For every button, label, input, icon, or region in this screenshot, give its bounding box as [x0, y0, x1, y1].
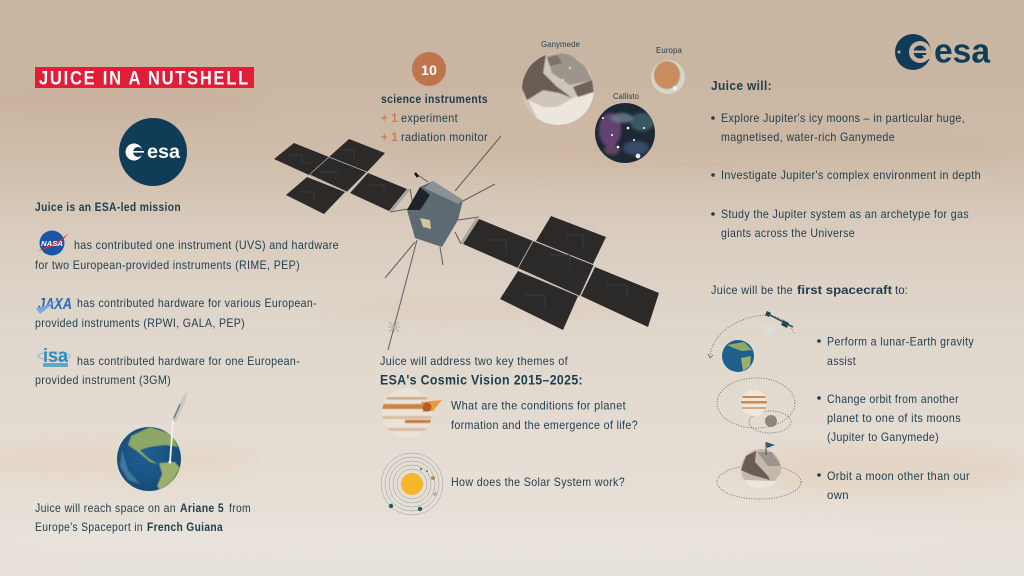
text: NASA contribution: for two European-provided instruments (RIME, PEP): [35, 258, 300, 272]
text: gravity assist: [817, 334, 974, 368]
text: NASA contribution: [35, 238, 339, 272]
text: cosmic vision heading: Juice will address two key themes of: [380, 354, 568, 368]
text: launch: Juice will reach space on an: [35, 501, 176, 515]
logo: JAXA: JAXA: [38, 296, 72, 313]
text: orbit change: (Jupiter to Ganymede): [827, 430, 939, 444]
text: moon orbit: [817, 469, 970, 502]
bullet: study: Study the Jupiter system as an archetype for gas: [721, 207, 969, 221]
bullet: study: giants across the Universe: [721, 226, 855, 240]
icon: lunar-Earth gravity assist: [708, 311, 794, 372]
text: JAXA contribution: [35, 296, 317, 330]
callout: science instruments: radiation monitor: [401, 130, 488, 144]
logo: NASA: NASA: [41, 239, 63, 248]
text: theme 1: [451, 398, 638, 432]
bullet: explore: [711, 111, 965, 144]
spacecraft body: [407, 181, 463, 247]
moon: Callisto: Callisto: [613, 91, 639, 101]
text: orbit change: [817, 392, 961, 444]
icon: moon orbit with flag: [717, 442, 801, 499]
callout: science instruments: [381, 52, 488, 144]
text: launch: from: [229, 501, 251, 515]
text: moon orbit: own: [827, 488, 849, 502]
text: orbit change: Change orbit from another: [827, 392, 959, 406]
bullet: explore: magnetised, water-rich Ganymede: [721, 130, 895, 144]
callout: science instruments: 10: [421, 62, 437, 78]
text: ISA contribution: [35, 354, 300, 387]
heading: first spacecraft: first spacecraft: [797, 283, 892, 297]
callout: science instruments: + 1: [381, 111, 398, 125]
bullet: explore: Explore Jupiter's icy moons – in particular huge,: [721, 111, 965, 125]
rocket trail: [170, 421, 173, 462]
heading: first spacecraft: to:: [895, 285, 908, 297]
text: theme 1: formation and the emergence of life?: [451, 418, 638, 432]
heading: Juice will: Juice will:: [711, 78, 772, 93]
text: gravity assist: Perform a lunar-Earth gravity: [827, 334, 974, 348]
callout: science instruments: science instruments: [381, 92, 488, 106]
text: theme 1: What are the conditions for planet: [451, 398, 626, 412]
text: cosmic vision heading: [380, 354, 583, 388]
text: launch: Ariane 5: [180, 501, 224, 515]
callout: science instruments: + 1: [381, 130, 398, 144]
logo: esa round badge: [119, 118, 187, 186]
illustration: Earth with Ariane 5: [117, 391, 187, 491]
text: launch: French Guiana: [147, 520, 223, 534]
text: JAXA contribution: provided instruments (RPWI, GALA, PEP): [35, 316, 245, 330]
icon: Solar System: [381, 453, 443, 515]
moon: Ganymede: Ganymede: [541, 39, 580, 49]
text: gravity assist: assist: [827, 354, 856, 368]
text: ISA contribution: provided instrument (3GM): [35, 373, 171, 387]
text: NASA contribution: has contributed one instrument (UVS) and hardware: [74, 238, 339, 252]
spacecraft: Juice: [274, 136, 659, 350]
callout: science instruments: experiment: [401, 111, 458, 125]
booms and antennas: [385, 136, 501, 350]
solar array: right: [460, 216, 659, 330]
rocket: [168, 391, 187, 464]
text: ISA contribution: has contributed hardware for one European-: [77, 354, 300, 368]
bullet: investigate: Investigate Jupiter's complex environment in depth: [721, 168, 981, 182]
text: JAXA contribution: has contributed hardware for various European-: [77, 296, 317, 310]
heading: ESA-led: Juice is an ESA-led mission: [35, 200, 181, 214]
panel: partners: [35, 118, 339, 387]
logo: esa round badge: esa: [147, 142, 180, 163]
moon: Europa: Europa: [656, 45, 682, 55]
heading: first spacecraft: [711, 283, 908, 297]
heading: first spacecraft: Juice will be the: [711, 283, 793, 297]
moon: Ganymede: [522, 41, 594, 125]
panel: Juice will: [711, 78, 981, 240]
solar array: left: [274, 139, 410, 214]
text: launch: [35, 501, 251, 534]
logo: NASA: [38, 230, 69, 256]
title: Juice in a nutshell: JUICE IN A NUTSHELL: [39, 68, 250, 90]
moon: Callisto: [595, 91, 655, 163]
logo: ISA: isa: [43, 346, 68, 367]
logo: esa top right: [895, 32, 991, 70]
icon: orbit change: [717, 378, 795, 433]
logo: esa top right: esa: [934, 32, 991, 70]
text: cosmic vision heading: ESA's Cosmic Vision 2015–2025:: [380, 372, 583, 388]
text: orbit change: planet to one of its moons: [827, 411, 961, 425]
text: launch: Europe's Spaceport in: [35, 520, 143, 534]
text: theme 2: How does the Solar System work?: [451, 475, 625, 489]
bullet: study: [711, 207, 969, 240]
moon: Europa: [651, 45, 685, 94]
text: moon orbit: Orbit a moon other than our: [827, 469, 970, 483]
icon: Jupiter with comet: [382, 389, 442, 432]
